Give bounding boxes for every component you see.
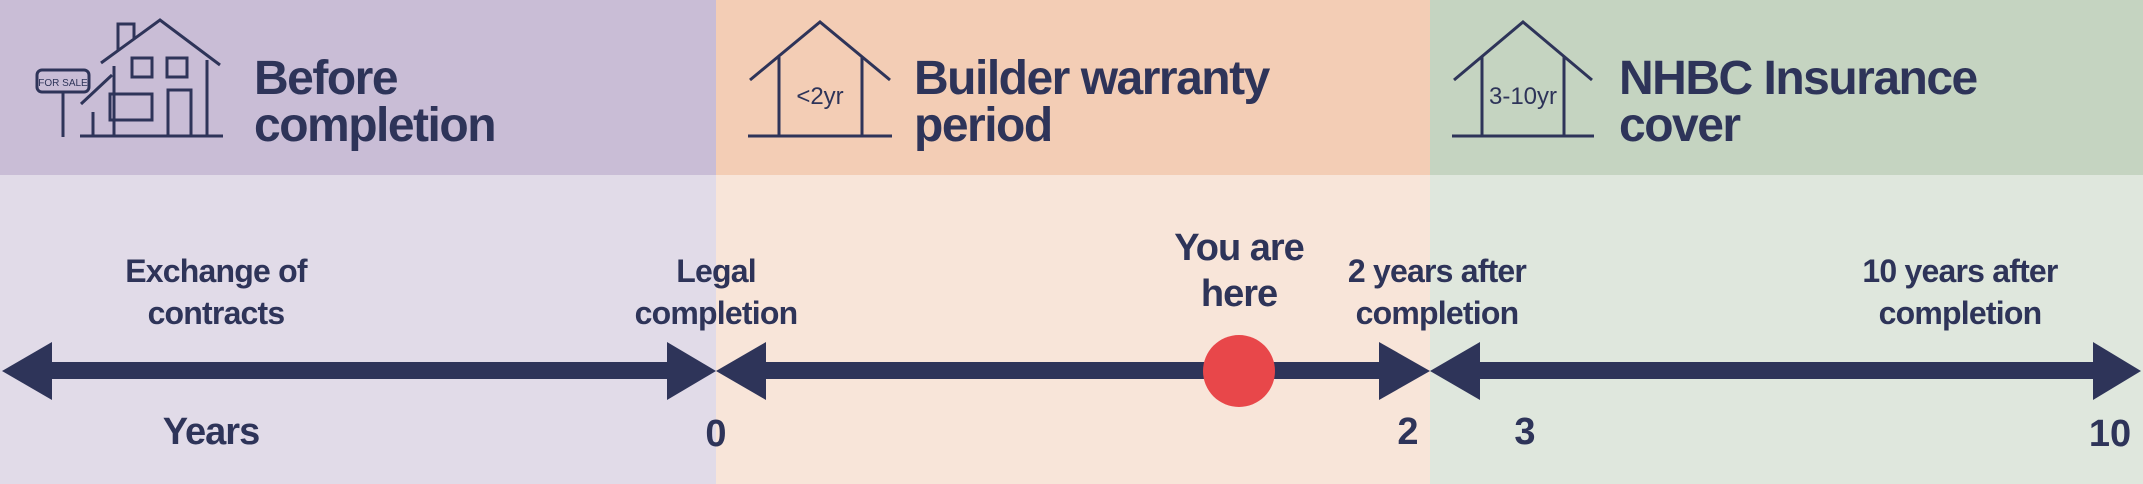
axis labels: years [163,411,2131,455]
icon: house <2yr [748,22,892,137]
axis labels: years: Years [163,411,259,453]
label: legal completion: completion [635,295,797,331]
label: exchange of contracts: contracts [148,295,284,331]
marker: you are here dot [1203,335,1275,407]
arrow: builder warranty [716,342,1430,400]
heading: before completion: completion [254,99,495,152]
heading: before completion: Before [254,52,397,105]
icon: house 3-10yr [1452,22,1594,137]
arrow: NHBC [1430,342,2141,400]
label: 10 years after completion: 10 years after [1862,253,2058,289]
panel: builder warranty [716,0,1430,484]
heading: builder warranty period: period [914,99,1052,152]
heading: NHBC insurance cover: NHBC Insurance [1619,52,1977,105]
heading: builder warranty period: Builder warranty [914,52,1269,105]
axis labels: years: 3 [1514,411,1536,453]
axis labels: years: 10 [2089,413,2131,455]
axis labels: years: 2 [1397,411,1419,453]
axis labels: years: 0 [705,413,727,455]
icon: house 3-10yr: 3-10yr [1489,83,1557,110]
icon: house <2yr: <2yr [796,83,844,110]
heading: NHBC insurance cover: cover [1619,99,1740,152]
arrow: before completion [2,342,716,400]
label: you are here: here [1201,273,1277,315]
panel: NHBC cover [1430,0,2143,484]
label: 2 years after completion: 2 years after [1348,253,1526,289]
icon: house for sale: FOR SALE [38,78,88,89]
icon: house for sale [37,20,223,137]
label: you are here: You are [1174,227,1304,269]
label: exchange of contracts: Exchange of [125,253,307,289]
panel: before completion [0,0,716,484]
label: legal completion: Legal [676,253,756,289]
label: 10 years after completion: completion [1879,295,2041,331]
label: 2 years after completion: completion [1356,295,1518,331]
